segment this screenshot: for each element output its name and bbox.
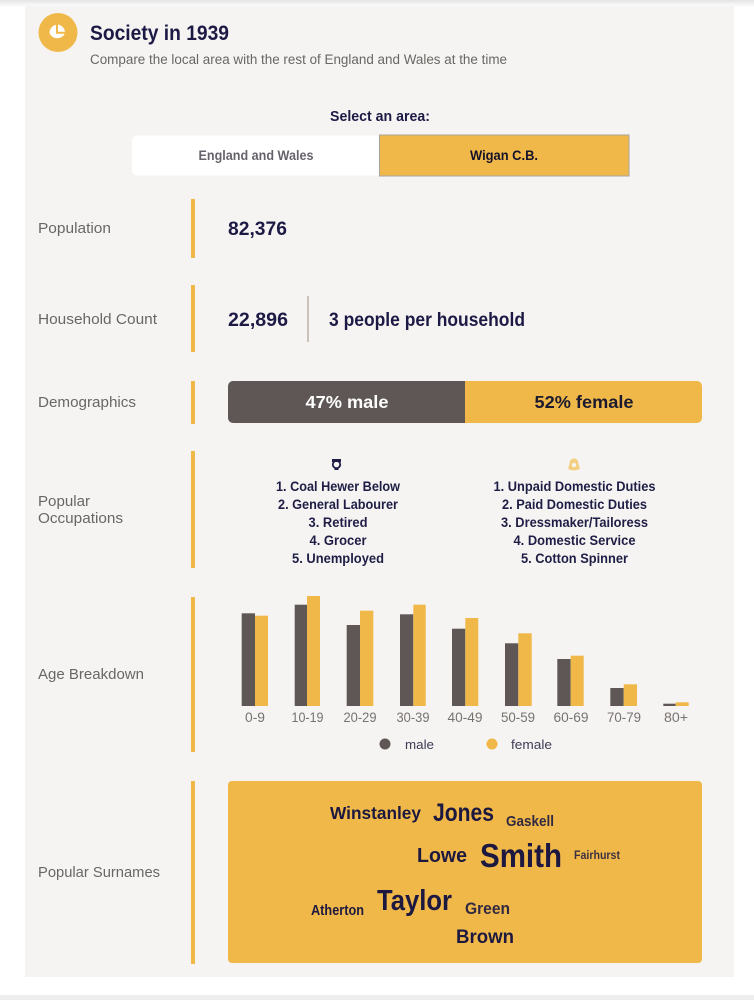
row: popular occupations: [38, 451, 656, 568]
word cloud: surnames: Taylor: [377, 885, 452, 917]
button: Wigan C.B.: Wigan C.B.: [470, 148, 538, 163]
word cloud: surnames: Jones: [433, 799, 494, 827]
axis labels: 60-69: [554, 710, 588, 725]
row: popular occupations: Occupations: [38, 510, 123, 527]
row: household count: [38, 285, 525, 352]
list: female occupations: 5. Cotton Spinner: [521, 551, 629, 566]
word cloud: surnames: Atherton: [311, 903, 364, 919]
word cloud: surnames: [228, 781, 702, 963]
list: female occupations: 4. Domestic Service: [514, 533, 636, 548]
bars: female: [255, 596, 689, 706]
bar chart: age breakdown: [242, 596, 689, 752]
axis labels: 20-29: [344, 710, 376, 725]
button: England and Wales: England and Wales: [198, 148, 314, 163]
bar: female share: 52% female: [534, 392, 634, 412]
list: male occupations: 5. Unemployed: [292, 551, 384, 566]
axis labels: 40-49: [448, 710, 482, 725]
row: population: [38, 199, 287, 258]
value: population: 82,376: [228, 218, 287, 240]
word cloud: surnames: Fairhurst: [574, 850, 620, 862]
list: male occupations: 3. Retired: [308, 515, 368, 530]
word cloud: surnames: Green: [465, 900, 510, 918]
axis labels: 50-59: [501, 710, 535, 725]
icon: male figure with hat: [332, 459, 341, 470]
axis labels: 30-39: [396, 710, 430, 725]
word cloud: surnames: Smith: [480, 837, 562, 874]
legend: male: [405, 737, 434, 752]
axis labels: 10-19: [292, 710, 324, 725]
word cloud: surnames: Brown: [456, 926, 514, 948]
row: age breakdown: [38, 596, 689, 752]
label: population: Population: [38, 220, 111, 237]
list: male occupations: 1. Coal Hewer Below: [276, 479, 400, 494]
value: household count: 22,896: [228, 309, 288, 331]
icon: female figure: [568, 458, 580, 470]
list: female occupations: 2. Paid Domestic Duties: [502, 497, 647, 512]
legend: female: [511, 737, 552, 752]
list: male occupations: 4. Grocer: [310, 533, 367, 548]
axis labels: 0-9: [245, 710, 265, 725]
axis labels: [245, 710, 688, 725]
row: popular surnames: [38, 781, 702, 964]
heading: select an area: Select an area:: [330, 109, 430, 125]
list: female occupations: 3. Dressmaker/Tailoress: [501, 515, 648, 530]
button: Wigan C.B.: [380, 135, 629, 176]
toggle: area selector: [132, 135, 629, 176]
word cloud: surnames: Gaskell: [506, 813, 554, 830]
list: female occupations: [494, 479, 656, 566]
word cloud: surnames: Lowe: [417, 844, 467, 867]
label: demographics: Demographics: [38, 394, 136, 411]
label: popular surnames: Popular Surnames: [38, 864, 160, 881]
axis labels: 80+: [664, 710, 688, 725]
list: male occupations: 2. General Labourer: [278, 497, 399, 512]
bar: male share: 47% male: [306, 392, 389, 412]
bar: female share: [465, 381, 702, 423]
subtitle: Compare the local area with the rest of England and Wales at the time: [90, 52, 507, 67]
button: England and Wales: [132, 136, 380, 176]
bar: male share: [228, 381, 465, 423]
axis labels: 70-79: [607, 710, 641, 725]
row: demographics: [38, 381, 702, 424]
bars: male: [242, 605, 676, 706]
label: household count: Household Count: [38, 311, 158, 328]
list: female occupations: 1. Unpaid Domestic Duties: [494, 479, 656, 494]
title: Society in 1939: [90, 22, 229, 45]
value: people per household: 3 people per household: [329, 309, 525, 331]
word cloud: surnames: Winstanley: [330, 803, 421, 823]
list: male occupations: [276, 479, 400, 566]
label: popular occupations: Popular: [38, 493, 90, 510]
icon: pie chart badge: [38, 13, 78, 52]
label: age breakdown: Age Breakdown: [38, 666, 144, 683]
legend: [380, 737, 552, 752]
